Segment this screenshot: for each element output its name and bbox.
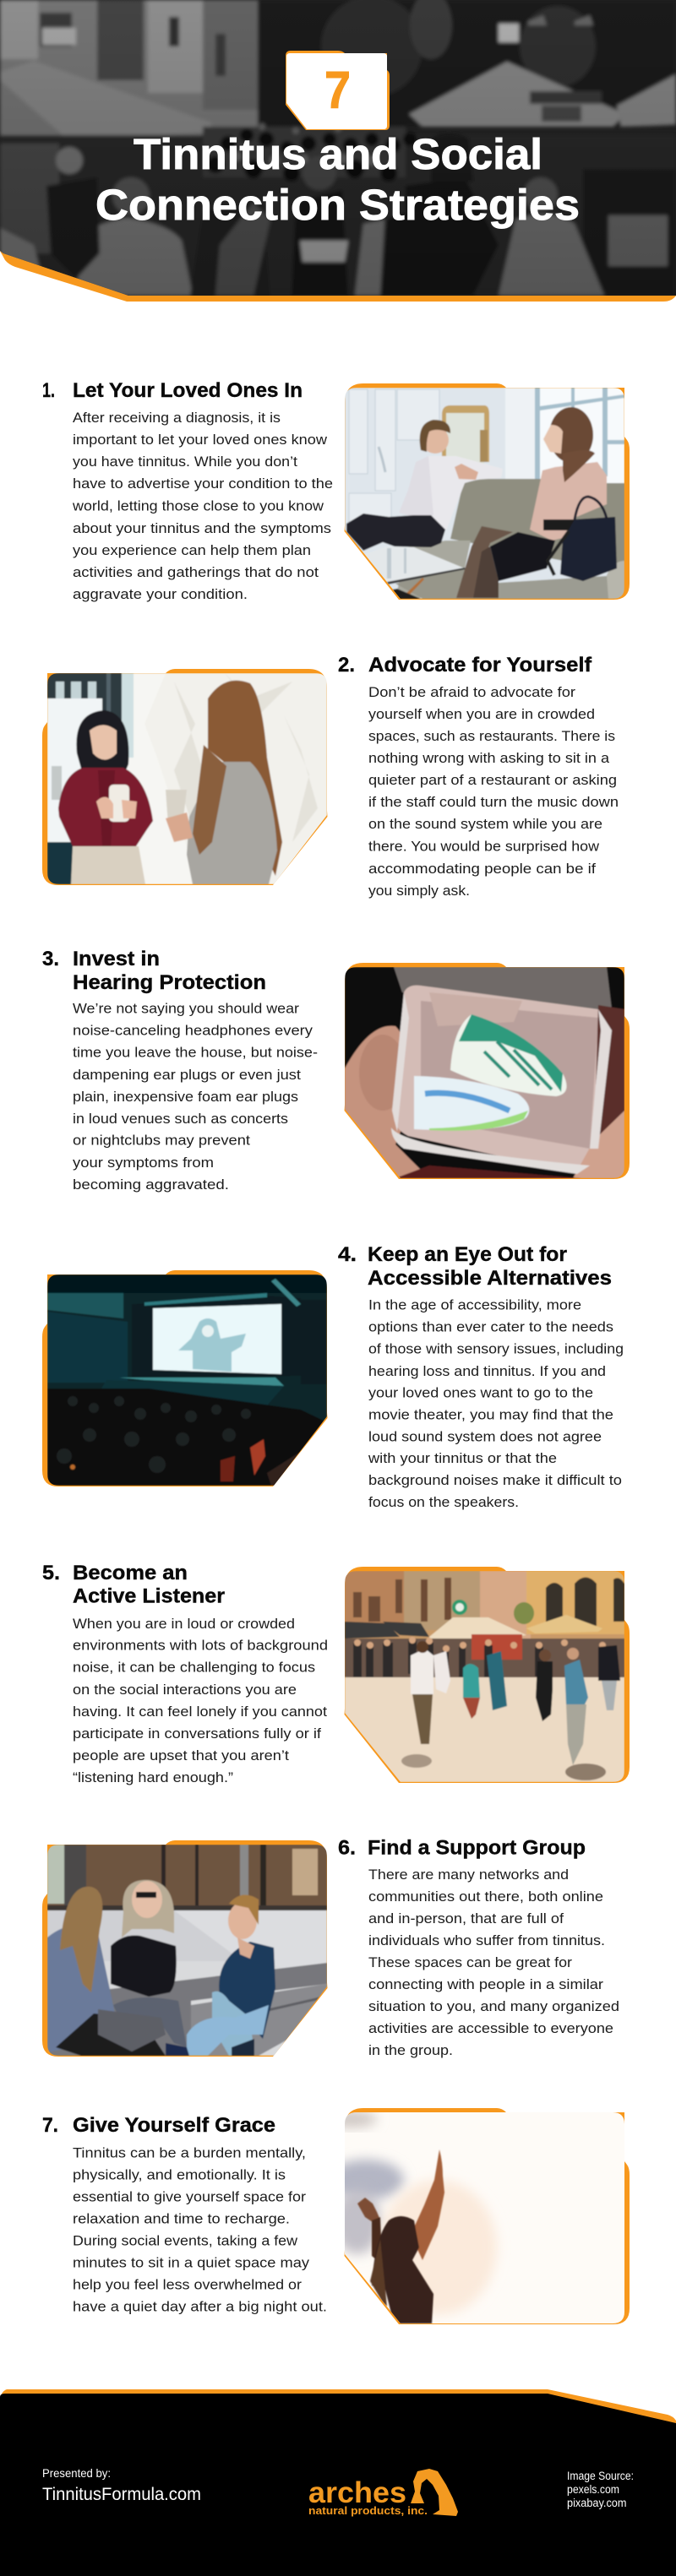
photo 3: ear plugs in a clear case (345, 963, 630, 1179)
body text 7: relaxation and time to recharge. (73, 2211, 290, 2226)
body text 4: with your tinnitus or that the (368, 1451, 557, 1466)
heading 3 (42, 948, 266, 994)
title: Tinnitus and Social (134, 130, 542, 178)
footer (0, 2389, 676, 2576)
body text 1: you have tinnitus. While you don’t (73, 454, 297, 470)
body text 3: We’re not saying you should wear (73, 1002, 300, 1017)
photo 1: couple talking on sofa (345, 383, 630, 600)
body text 5: participate in conversations fully or if (73, 1726, 321, 1742)
body text 7: physically, and emotionally. It is (73, 2167, 286, 2182)
footer accent (0, 2389, 676, 2426)
image sources: Image Source: (567, 2470, 634, 2482)
body text 6: and in-person, that are full of (368, 1911, 564, 1927)
icon: delicate arch (411, 2469, 458, 2516)
heading 6: Find a Support Group (368, 1836, 586, 1860)
body text 7: minutes to sit in a quiet space may (73, 2255, 310, 2270)
body text 4: options than ever cater to the needs (368, 1319, 613, 1334)
heading 3: Invest in (73, 948, 160, 970)
presented by: TinnitusFormula.com (42, 2485, 201, 2504)
body text 5: on the social interactions you are (73, 1682, 297, 1698)
number 7: 7 (324, 62, 351, 120)
body text 2: accommodating people can be if (368, 861, 596, 877)
body text 4: In the age of accessibility, more (368, 1297, 581, 1312)
strategy 7 (42, 2108, 630, 2324)
body text 4: your loved ones want to go to the (368, 1385, 593, 1400)
body text 3: dampening ear plugs or even just (73, 1068, 301, 1083)
body text 1 (72, 410, 333, 602)
body text 3 (73, 1002, 318, 1193)
image sources: pixabay.com (567, 2497, 627, 2509)
body text 6: These spaces can be great for (368, 1955, 573, 1970)
presented by: Presented by: (42, 2466, 111, 2480)
footer background (0, 2394, 676, 2576)
body text 1: aggravate your condition. (73, 587, 248, 602)
heading 2: 2. (338, 654, 355, 677)
body text 2: nothing wrong with asking to sit in a (368, 751, 610, 766)
body text 3: plain, inexpensive foam ear plugs (73, 1090, 298, 1105)
heading 2: Advocate for Yourself (368, 654, 592, 677)
body text 2: Don’t be afraid to advocate for (368, 685, 576, 700)
body text 6: individuals who suffer from tinnitus. (368, 1933, 605, 1948)
heading 3: Hearing Protection (73, 971, 266, 994)
body text 5: having. It can feel lonely if you cannot (73, 1704, 327, 1720)
heading 5: 5. (42, 1562, 60, 1584)
body text 4: of those with sensory issues, including (368, 1341, 624, 1356)
photo 4: movie theater (42, 1270, 328, 1486)
body text 6: in the group. (368, 2043, 453, 2058)
heading 3: 3. (42, 948, 59, 970)
body text 6: situation to you, and many organized (368, 1999, 619, 2014)
heading 4: 4. (338, 1243, 357, 1266)
body text 5 (73, 1617, 328, 1785)
heading 5 (42, 1562, 225, 1608)
body text 2: on the sound system while you are (368, 817, 602, 832)
header accent (0, 245, 676, 302)
heading 4 (338, 1243, 612, 1290)
body text 1: important to let your loved ones know (73, 432, 327, 448)
header banner (0, 0, 676, 302)
body text 1: have to advertise your condition to the (73, 476, 333, 492)
body text 5: noise, it can be challenging to focus (73, 1660, 315, 1676)
body text 3: noise-canceling headphones every (73, 1024, 313, 1039)
photo 2: two women with coffee (42, 669, 328, 885)
presented by (42, 2466, 201, 2504)
heading 7: Give Yourself Grace (73, 2114, 275, 2137)
body text 1: world, letting those close to you know (72, 498, 324, 514)
body text 4: movie theater, you may find that the (368, 1407, 613, 1422)
body text 2: yourself when you are in crowded (368, 707, 595, 722)
image sources: pexels.com (567, 2483, 619, 2496)
heading 7: 7. (42, 2114, 58, 2137)
title: Connection Strategies (95, 181, 580, 229)
body text 6: communities out there, both online (368, 1889, 603, 1905)
body text 5: people are upset that you aren’t (73, 1748, 289, 1764)
body text 5: “listening hard enough.” (73, 1770, 233, 1785)
body text 1: After receiving a diagnosis, it is (73, 410, 281, 426)
logo: arches natural products (308, 2469, 458, 2517)
body text 2: spaces, such as restaurants. There is (368, 729, 615, 744)
heading 5: Active Listener (73, 1584, 225, 1608)
body text 6: There are many networks and (368, 1867, 569, 1883)
body text 4: hearing loss and tinnitus. If you and (368, 1364, 606, 1379)
body text 7: help you feel less overwhelmed or (73, 2277, 303, 2292)
number badge (286, 51, 390, 130)
body text 4: focus on the speakers. (368, 1495, 519, 1510)
body text 7: essential to give yourself space for (73, 2189, 307, 2204)
body text 2: if the staff could turn the music down (368, 795, 619, 810)
strategy 2 (42, 654, 619, 899)
body text 2: there. You would be surprised how (368, 840, 599, 855)
body text 3: becoming aggravated. (73, 1177, 229, 1193)
body text 6: activities are accessible to everyone (368, 2021, 613, 2036)
body text 5: When you are in loud or crowded (73, 1617, 295, 1632)
body text 4 (368, 1297, 624, 1510)
title (95, 130, 580, 229)
body text 4: background noises make it difficult to (368, 1473, 622, 1488)
body text 1: you experience can help them plan (73, 543, 311, 558)
strategy 3 (42, 948, 630, 1193)
body text 6: connecting with people in a similar (368, 1977, 604, 1992)
body text 7 (73, 2145, 327, 2314)
strategy 4 (42, 1243, 624, 1510)
heading 1: Let Your Loved Ones In (73, 379, 303, 402)
body text 6 (368, 1867, 619, 2058)
strategy 5 (42, 1562, 630, 1785)
body text 2 (368, 685, 619, 899)
body text 1: activities and gatherings that do not (73, 565, 319, 580)
body text 2: you simply ask. (368, 883, 470, 899)
photo 5: busy market square (345, 1567, 630, 1783)
heading 1: 1. (42, 379, 55, 402)
body text 2: quieter part of a restaurant or asking (368, 773, 617, 788)
image sources (567, 2470, 634, 2509)
body text 3: or nightclubs may prevent (73, 1133, 250, 1149)
heading 4: Accessible Alternatives (368, 1267, 612, 1290)
header photo: crowded street (0, 0, 676, 297)
heading 4: Keep an Eye Out for (368, 1243, 567, 1266)
body text 5: environments with lots of background (73, 1639, 328, 1654)
body text 1: about your tinnitus and the symptoms (73, 521, 331, 536)
body text 7: have a quiet day after a big night out. (73, 2299, 327, 2314)
photo 7: woman raising arms to the sky (326, 2108, 630, 2324)
logo: arches natural products: natural products, inc. (308, 2504, 428, 2517)
strategy 1 (42, 379, 630, 602)
body text 4: loud sound system does not agree (368, 1429, 602, 1444)
strategy 6 (42, 1836, 619, 2058)
photo 6: three friends on steps (42, 1840, 328, 2057)
body text 7: During social events, taking a few (73, 2233, 297, 2248)
body text 3: time you leave the house, but noise- (73, 1046, 318, 1061)
body text 7: Tinnitus can be a burden mentally, (73, 2145, 306, 2160)
heading 6: 6. (338, 1836, 356, 1860)
heading 5: Become an (73, 1562, 188, 1584)
body text 3: your symptoms from (73, 1155, 214, 1171)
logo: arches natural products: arches (308, 2476, 406, 2509)
body text 3: in loud venues such as concerts (73, 1111, 288, 1127)
